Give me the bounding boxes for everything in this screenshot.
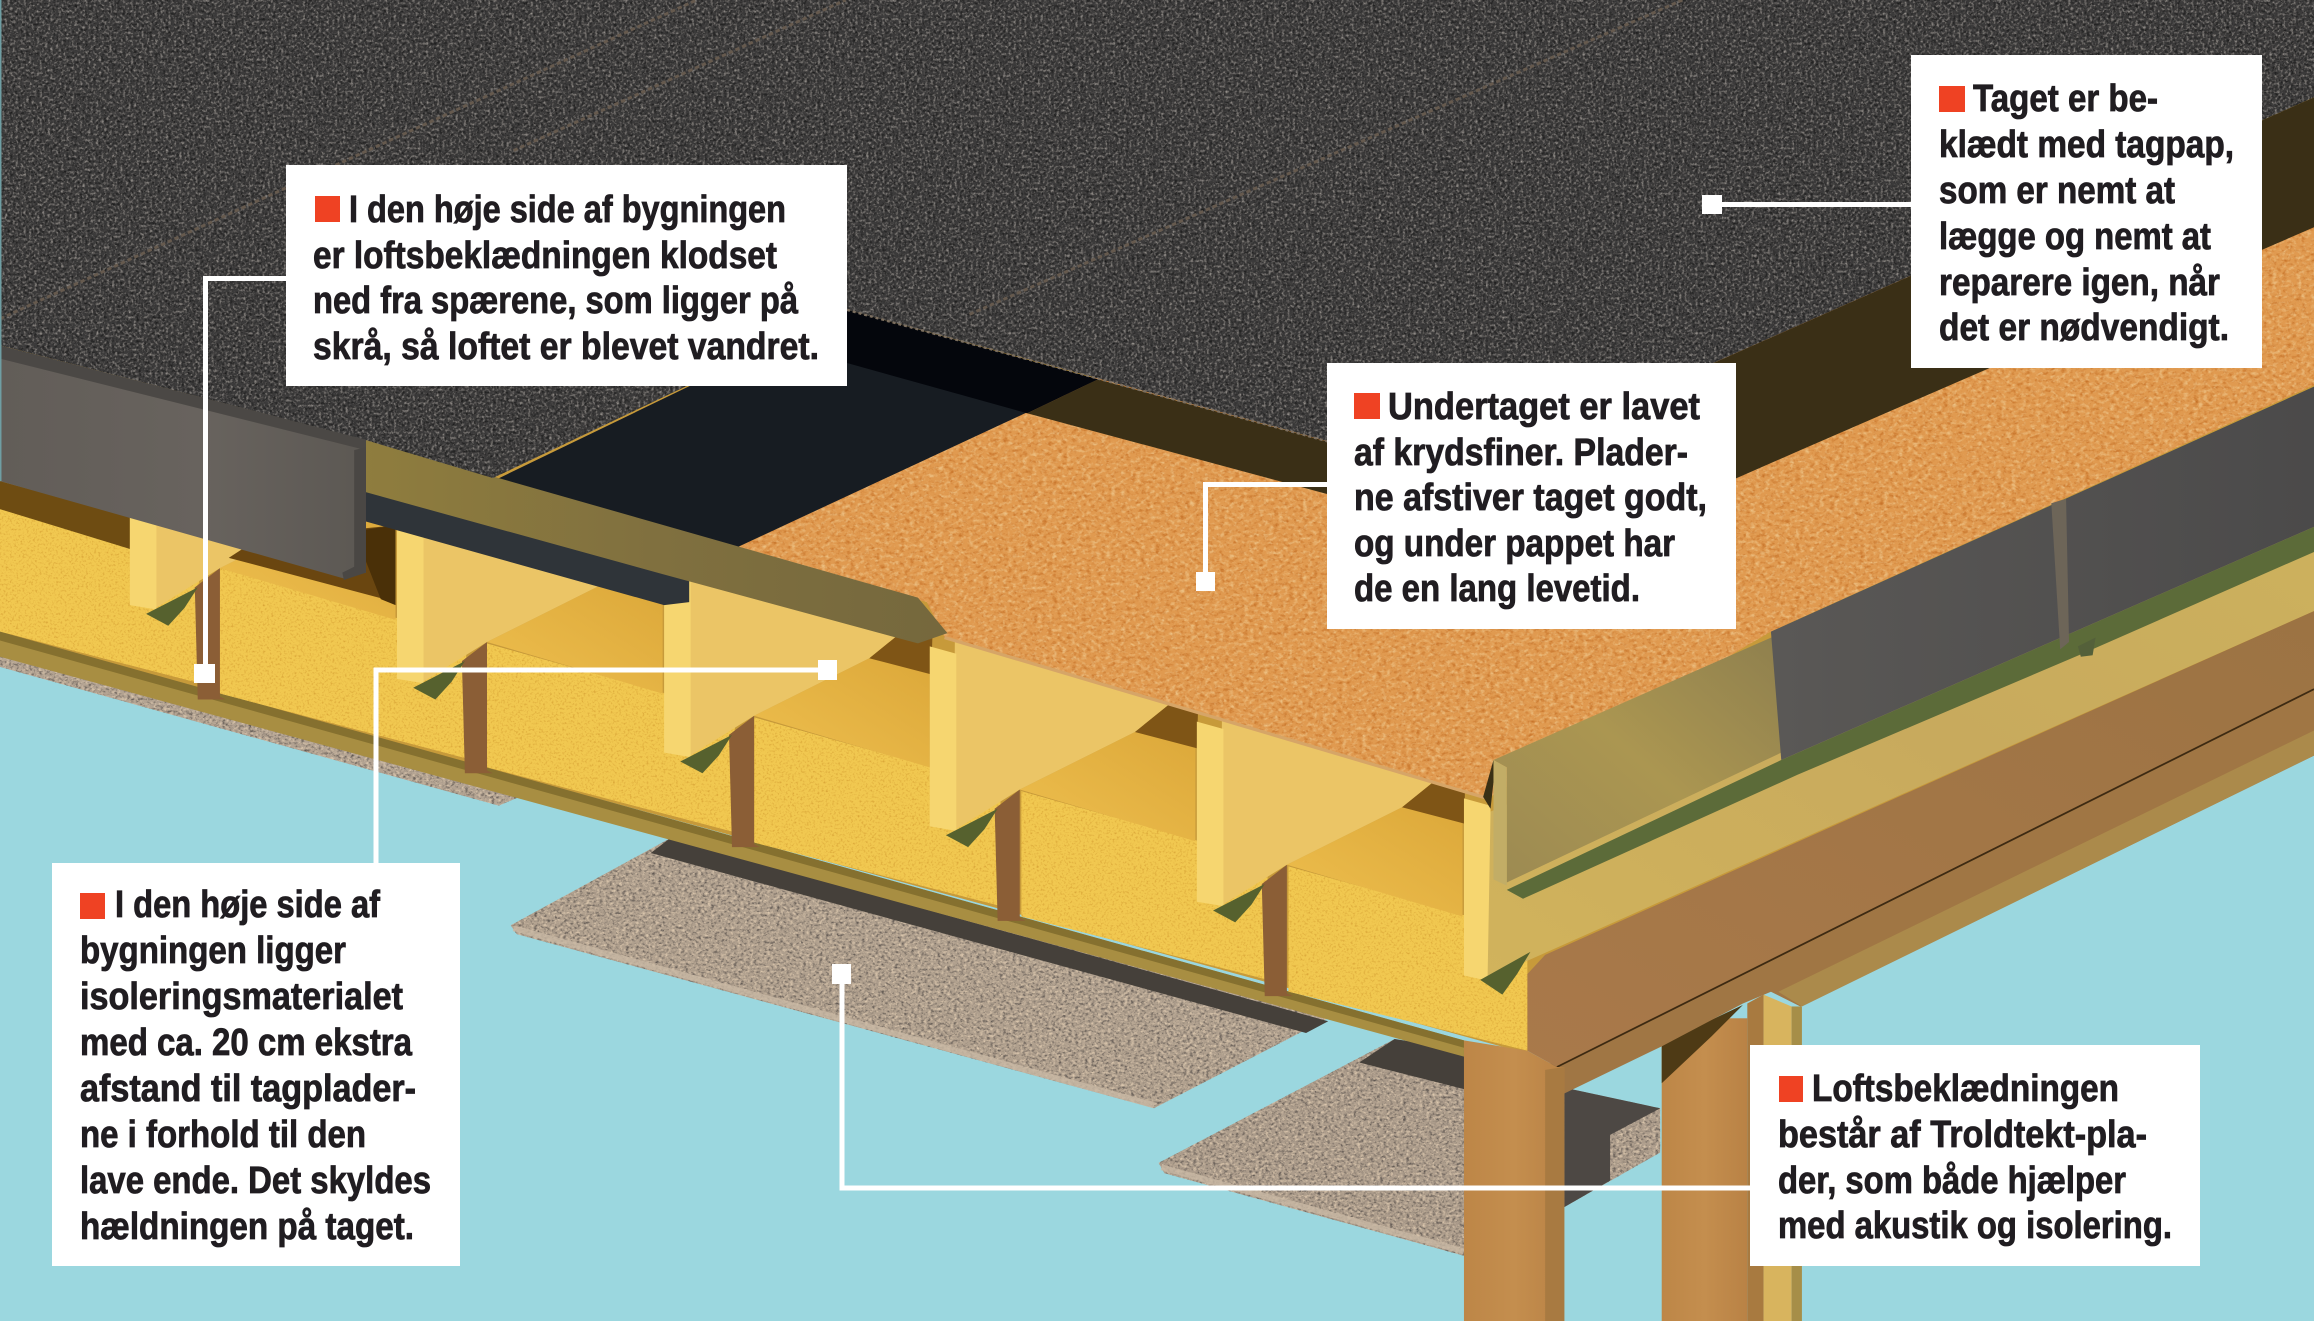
green strip — [1507, 527, 2314, 899]
pointer: tagpap — [1702, 195, 1911, 214]
brown fascia beam — [1527, 611, 2314, 1067]
roofing seams — [0, 0, 1682, 319]
callout: isoleringsmateriale: I den høje side af — [115, 884, 380, 926]
eave beam — [0, 632, 1464, 1057]
wooden fascia batten — [363, 440, 947, 643]
pointer: loftsbeklædning klodset — [194, 278, 286, 683]
grey flashing left — [0, 345, 366, 580]
callout: Troldtekt: der, som både hjælper — [1778, 1160, 2126, 1202]
pointer: Troldtekt — [832, 964, 1750, 1188]
callout: isoleringsmateriale: isoleringsmaterialet — [80, 976, 403, 1018]
callout: isoleringsmateriale — [52, 863, 460, 1266]
callout: undertag — [1327, 363, 1736, 629]
wooden end board — [1483, 633, 1781, 885]
left edge line — [0, 0, 1, 481]
callout: isoleringsmateriale: bygningen ligger — [80, 930, 346, 972]
callout: tagpap: klædt med tagpap, — [1939, 124, 2234, 166]
callout: høje side, loftsbeklædning: ned fra spærene, som ligger på — [313, 280, 799, 322]
callout: høje side, loftsbeklædning: I den høje side af bygningen — [349, 189, 786, 231]
callout: isoleringsmateriale: ne i forhold til den — [80, 1114, 366, 1156]
dark underlayment sheet — [493, 310, 1098, 549]
plywood underlay — [733, 148, 2314, 798]
green wedge at corner — [1480, 952, 1530, 995]
callout: undertag: Undertaget er lavet — [1388, 386, 1700, 428]
callout: Troldtekt — [1750, 1045, 2200, 1266]
grey flashing right — [1771, 387, 2314, 760]
front column — [1464, 1040, 1564, 1321]
callout: tagpap: Taget er be- — [1973, 78, 2158, 120]
callout: isoleringsmateriale: hældningen på taget. — [80, 1206, 414, 1248]
callout: undertag: ne afstiver taget godt, — [1354, 477, 1707, 519]
callout: undertag: og under pappet har — [1354, 523, 1675, 565]
end board — [1488, 443, 2314, 978]
callout: isoleringsmateriale: med ca. 20 cm ekstra — [80, 1022, 413, 1064]
plywood edge — [944, 638, 1488, 798]
callout: tagpap: reparere igen, når — [1939, 262, 2220, 304]
shadow on plywood — [1027, 97, 2314, 556]
ceiling panels: Troldtekt boards — [0, 649, 1660, 1256]
insulation blocks — [0, 509, 1527, 1051]
callout: undertag: de en lang levetid. — [1354, 568, 1640, 610]
callout: isoleringsmateriale: afstand til tagplader- — [80, 1068, 416, 1110]
tar-paper roofing — [0, 0, 2314, 478]
callout: tagpap: det er nødvendigt. — [1939, 307, 2229, 349]
rear column — [1662, 995, 1802, 1321]
posts between insulation blocks — [195, 568, 1293, 996]
callout: høje side, loftsbeklædning: er loftsbeklædningen klodset — [313, 235, 777, 277]
callout: tagpap: som er nemt at — [1939, 170, 2175, 212]
pointer: krydsfiner — [1196, 484, 1327, 591]
callout: undertag: af krydsfiner. Plader- — [1354, 432, 1688, 474]
black batten — [359, 490, 689, 605]
callout: tagpap: lægge og nemt at — [1939, 216, 2211, 258]
callout: Troldtekt: Loftsbeklædningen — [1812, 1068, 2119, 1110]
roofing front edge — [847, 310, 1457, 477]
deep shadow on sheet — [847, 310, 1098, 413]
callout: tagpap — [1911, 55, 2262, 368]
pointer: isoleringsmateriale — [376, 660, 837, 863]
lower beam — [1557, 689, 2314, 1094]
callout: høje side, loftsbeklædning — [286, 165, 847, 386]
callout: høje side, loftsbeklædning: skrå, så loftet er blevet vandret. — [313, 326, 819, 368]
callout: Troldtekt: med akustik og isolering. — [1778, 1205, 2172, 1247]
rafters and insulation cavities — [0, 421, 1491, 981]
callout: isoleringsmateriale: lave ende. Det skyldes — [80, 1160, 431, 1202]
callout: Troldtekt: består af Troldtekt-pla- — [1778, 1114, 2147, 1156]
structure backing — [0, 0, 2314, 1054]
